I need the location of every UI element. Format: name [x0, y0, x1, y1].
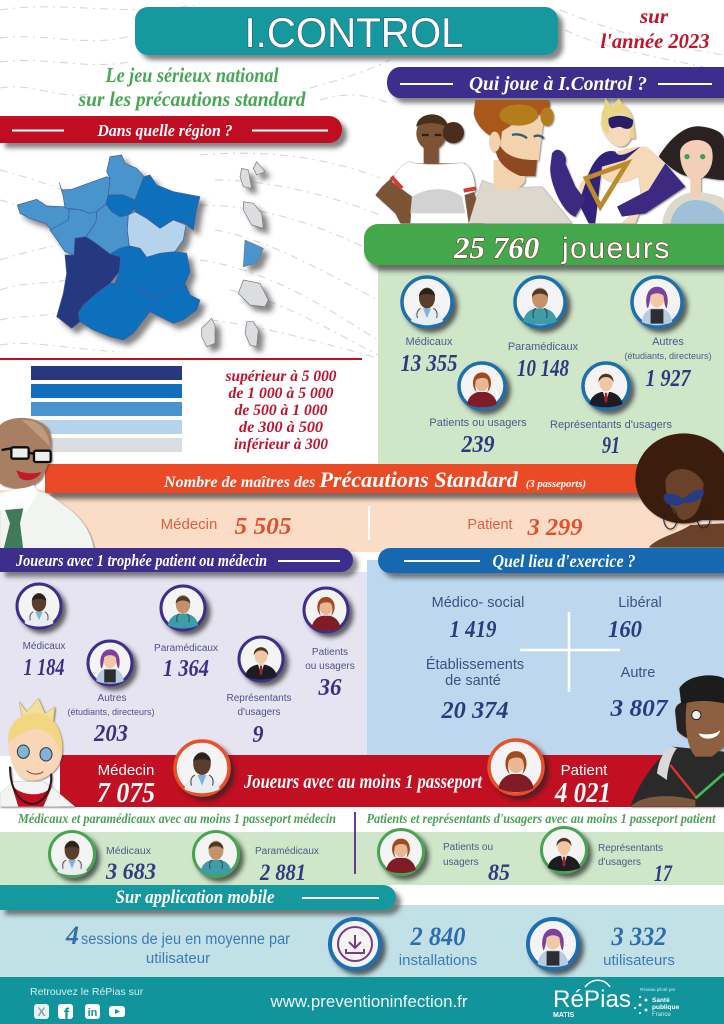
period label: sur — [639, 4, 669, 28]
stat: other — [609, 665, 669, 722]
label: others: 203 — [93, 721, 128, 747]
character: blonde doctor — [0, 698, 75, 807]
panel: passports by group — [0, 828, 724, 886]
avatar: patients — [304, 588, 348, 632]
stat: health facilities: Établissements — [426, 656, 524, 673]
label: others: 1 927 — [646, 366, 691, 392]
stat: patients: 85 — [488, 860, 510, 885]
label: paramedical: 10 148 — [517, 356, 569, 382]
logo: Santé publique France: publique — [652, 1004, 679, 1011]
avatar: others — [88, 641, 132, 685]
total players count: 25 760 — [453, 230, 539, 265]
stat: other: Autre — [621, 665, 655, 681]
stat: paramedical: 2 881 — [259, 860, 306, 885]
stat: representatives: Représentants — [598, 843, 663, 854]
label: patients — [429, 417, 527, 458]
label: representatives — [550, 419, 672, 459]
stat: representatives: 17 — [654, 861, 673, 886]
panel: total players — [364, 224, 724, 465]
label: others: Autres — [652, 336, 684, 348]
panel: standard precautions masters — [0, 464, 724, 552]
stat: doctor masters — [161, 514, 292, 540]
label: others: (étudiants, directeurs) — [67, 707, 155, 717]
character: dark-haired woman — [659, 126, 724, 223]
stat: medico-social — [432, 595, 524, 643]
total players count: joueurs — [561, 232, 671, 265]
heading: who plays — [387, 67, 724, 98]
heading: place of practice: Quel lieu d'exercice ? — [492, 551, 636, 571]
logo: Santé publique France — [634, 987, 679, 1018]
headings: passports by group — [17, 812, 716, 874]
headings: passports by group: Médicaux et paramédicaux avec au moins 1 passeport médecin — [17, 812, 336, 827]
avatar: doctor — [175, 741, 229, 795]
stat: doctor passports: 7 075 — [97, 777, 155, 809]
avatar: others — [632, 277, 682, 327]
heading: region — [0, 116, 342, 143]
panel: trophy players — [0, 548, 367, 756]
avatar: representatives — [239, 637, 283, 681]
avatar: medical — [50, 832, 94, 876]
avatar: representatives — [583, 363, 629, 409]
logo: RéPias MATIS — [553, 980, 631, 1019]
label: paramedical: Paramédicaux — [154, 643, 218, 654]
logo: RéPias MATIS: RéPias — [553, 986, 631, 1013]
label: representatives: Représentants d'usagers — [550, 419, 672, 431]
label: patients: 239 — [461, 432, 494, 458]
heading: trophy players — [0, 548, 353, 572]
heading: place of practice — [378, 548, 724, 573]
social media prompt: Retrouvez le RéPias sur — [30, 986, 144, 998]
legend: player count by region: de 300 à 500 — [239, 419, 323, 436]
stat: medical: Médicaux — [106, 845, 152, 857]
stat: users — [603, 922, 675, 969]
footer — [0, 977, 724, 1024]
stat: doctor passports: Médecin — [98, 762, 154, 779]
banner: players with at least one passport — [60, 740, 724, 809]
label: paramedical — [508, 341, 579, 382]
character: masked heroine — [550, 98, 685, 223]
logo: RéPias MATIS: MATIS — [553, 1012, 575, 1019]
subtitle — [78, 63, 306, 111]
label: patients: Patients ou usagers — [429, 417, 527, 429]
stat: paramedical — [255, 846, 319, 885]
subtitle: Le jeu sérieux national — [105, 63, 279, 87]
stat: sessions per user: 4 — [65, 921, 79, 950]
avatar: medical — [17, 584, 61, 628]
stat: representatives — [598, 843, 673, 886]
avatar: paramedical — [161, 586, 205, 630]
stat: users: 3 332 — [611, 922, 666, 951]
icon: Facebook: f — [64, 1006, 70, 1023]
icon: LinkedIn: in — [88, 1007, 98, 1019]
label: medical — [400, 336, 458, 377]
label: paramedical: Paramédicaux — [508, 341, 579, 353]
heading: trophy players: Joueurs avec 1 trophée patient ou médecin — [15, 551, 267, 570]
icon: X: X — [37, 1005, 46, 1019]
legend: player count by region: supérieur à 5 000 — [225, 368, 337, 385]
label: medical: 1 184 — [24, 655, 64, 681]
title banner — [135, 7, 558, 56]
map of France by region — [17, 155, 268, 347]
stat: liberal: Libéral — [618, 595, 662, 611]
stat: liberal — [608, 595, 662, 643]
character: nurse — [375, 114, 484, 223]
stat: other: 3 807 — [609, 696, 669, 722]
logo: Santé publique France: Réseau piloté par — [640, 987, 676, 992]
legend: player count by region: de 500 à 1 000 — [234, 402, 328, 419]
character: afro woman — [635, 433, 724, 547]
stat: patient masters: Patient — [467, 517, 513, 533]
avatar: patients — [378, 830, 424, 874]
heading: who plays: Qui joue à I.Control ? — [469, 73, 647, 95]
label: paramedical: 1 364 — [163, 656, 209, 682]
label: patients: 36 — [318, 675, 342, 701]
stat: sessions per user — [65, 921, 290, 967]
stat: medico-social: Médico- social — [432, 595, 524, 611]
character: cap-wearing player — [630, 675, 724, 807]
heading: mobile app — [0, 885, 396, 910]
label: patients: ou usagers — [305, 661, 355, 672]
stat: representatives: d'usagers — [598, 857, 641, 868]
label: medical: 13 355 — [400, 351, 458, 377]
stat: health facilities: 20 374 — [440, 698, 508, 724]
label: medical: Médicaux — [23, 641, 65, 652]
avatar: paramedical — [194, 832, 238, 876]
stat: sessions per user: sessions de jeu en moyenne par — [81, 931, 290, 948]
label: representatives: 9 — [252, 722, 264, 748]
stat: patients: Patients ou — [443, 842, 493, 853]
icon: X — [34, 1004, 49, 1019]
label: others — [67, 693, 155, 747]
icon: download — [330, 919, 380, 969]
label: medical — [23, 641, 65, 681]
stat: doctor masters: Médecin — [161, 516, 217, 533]
period label: l'année 2023 — [600, 29, 710, 53]
subtitle: sur les précautions standard — [78, 87, 306, 111]
panel: mobile app — [0, 885, 724, 978]
label: representatives: d'usagers — [237, 707, 281, 718]
label: patients — [305, 647, 355, 701]
panel: place of practice — [367, 548, 724, 756]
stat: users: utilisateurs — [603, 952, 675, 969]
label: patients: Patients — [312, 647, 348, 658]
stat: installations: installations — [399, 952, 477, 969]
title banner: I.CONTROL — [244, 9, 464, 56]
stat: patient passports: Patient — [561, 762, 608, 779]
heading: mobile app: Sur application mobile — [116, 887, 275, 908]
icon: Facebook — [58, 1004, 73, 1023]
stat: patients: usagers — [443, 857, 479, 868]
avatar: paramedical — [515, 277, 565, 327]
legend: player count by region — [0, 359, 362, 453]
stat: patient masters — [467, 515, 582, 541]
period label — [600, 4, 710, 53]
character: bald doctor — [0, 418, 94, 550]
stat: patients — [443, 842, 510, 885]
avatar: patient — [489, 740, 543, 794]
stat: medical: 3 683 — [105, 859, 156, 884]
label: paramedical — [154, 643, 218, 682]
logo: Santé publique France: Santé — [652, 997, 670, 1004]
stat: installations: 2 840 — [410, 922, 466, 951]
icon: YouTube — [109, 1006, 125, 1017]
stat: patient masters: 3 299 — [526, 515, 582, 541]
stat: medical — [105, 845, 156, 884]
stat: patient passports — [554, 762, 611, 809]
banner heading: Joueurs avec au moins 1 passeport — [243, 771, 483, 793]
label: representatives — [226, 693, 292, 748]
stat: liberal: 160 — [608, 617, 642, 643]
avatar: representatives — [542, 828, 586, 872]
label: representatives: 91 — [602, 433, 620, 459]
label: others — [624, 336, 712, 392]
stat: paramedical: Paramédicaux — [255, 846, 319, 857]
avatar: users — [528, 919, 578, 969]
label: representatives: Représentants — [226, 693, 292, 704]
website: www.preventioninfection.fr — [270, 992, 468, 1011]
legend: player count by region: de 1 000 à 5 000 — [228, 385, 334, 402]
stat: installations — [399, 922, 477, 969]
stat: doctor passports — [97, 762, 155, 809]
avatar: medical — [402, 277, 452, 327]
stat: sessions per user: utilisateur — [146, 950, 210, 967]
label: others: Autres — [98, 693, 126, 704]
legend: player count by region: inférieur à 300 — [234, 436, 328, 453]
stat: health facilities — [426, 656, 524, 724]
heading: region: Dans quelle région ? — [97, 121, 232, 140]
background contour lines — [0, 4, 724, 358]
logo: Santé publique France: France — [652, 1012, 671, 1018]
characters: four players — [375, 98, 724, 223]
character: bearded man — [469, 100, 572, 223]
stat: medico-social: 1 419 — [450, 617, 496, 643]
stat: doctor masters: 5 505 — [234, 514, 292, 540]
label: medical: Médicaux — [405, 336, 453, 348]
icon: LinkedIn — [85, 1004, 100, 1019]
avatar: patients — [459, 363, 505, 409]
stat: patient passports: 4 021 — [554, 777, 611, 809]
label: others: (étudiants, directeurs) — [624, 351, 712, 361]
stat: health facilities: de santé — [445, 673, 501, 689]
heading: masters count: Nombre de maîtres des Précautions Standard (3 passeports) — [163, 467, 586, 492]
